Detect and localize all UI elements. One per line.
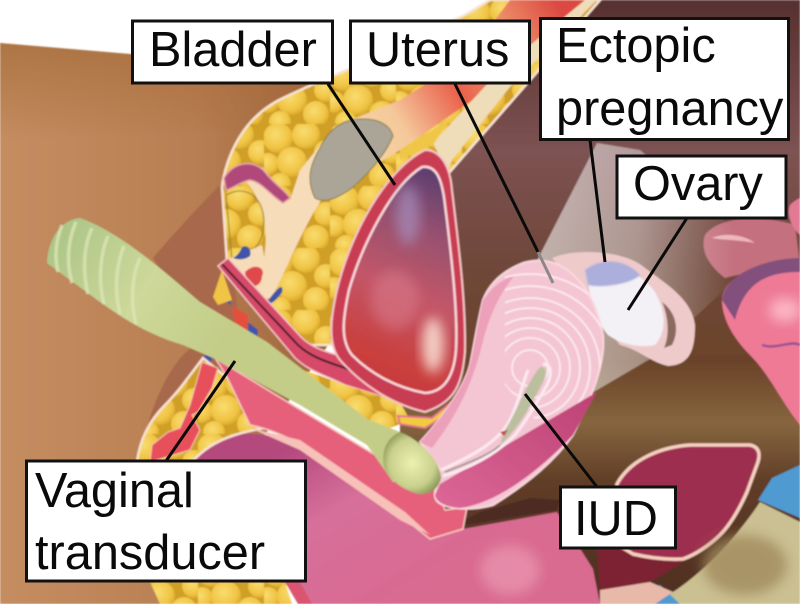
pubic bone: gray	[310, 119, 393, 200]
lumen highlight	[422, 317, 444, 373]
leader line: ectopic pregnancy	[590, 140, 605, 262]
abdominal wall: peach fascia	[433, 0, 597, 172]
red vessels	[245, 267, 263, 286]
label: Vaginal transducer: transducer	[35, 526, 265, 580]
leader line: IUD	[525, 394, 597, 487]
blue vessels	[202, 246, 283, 363]
uterus	[420, 261, 624, 509]
label: IUD	[560, 487, 676, 548]
lower uterine muscle	[435, 392, 597, 508]
bladder lumen	[344, 167, 456, 393]
label: Ectopic pregnancy	[540, 18, 788, 140]
blue spinal disc	[758, 465, 800, 518]
urethra	[218, 258, 400, 402]
bone and sacrum	[655, 502, 800, 604]
ovary with tube	[552, 252, 695, 366]
abdominal wall: muscle band	[317, 0, 597, 200]
myometrial rings	[504, 272, 601, 419]
subcutaneous fat	[222, 0, 600, 345]
vaginal wall	[215, 358, 467, 539]
leader line: uterus	[455, 84, 553, 283]
label: Uterus	[350, 21, 530, 83]
peach tissue by urethra	[226, 245, 272, 300]
label: Ovary: Ovary	[633, 157, 764, 211]
bowel	[170, 434, 600, 604]
ultrasound cone	[430, 143, 735, 482]
skin: outer thigh and abdomen	[0, 43, 360, 604]
lower fat lobule	[226, 191, 264, 260]
label: Ectopic pregnancy: Ectopic	[556, 19, 716, 73]
yellow strip above the bladder	[400, 118, 450, 160]
label: Bladder: Bladder	[149, 23, 317, 77]
lower right rectum sac	[597, 445, 759, 590]
dark slit under the uterus	[465, 498, 560, 525]
fat near vaginal opening	[213, 270, 232, 305]
endometrium outline	[443, 364, 550, 476]
label: Vaginal transducer	[26, 461, 306, 581]
label: Vaginal transducer: Vaginal	[35, 464, 194, 518]
label: Ectopic pregnancy: pregnancy	[556, 82, 784, 136]
transducer body	[47, 218, 400, 482]
left uterine wall	[420, 275, 515, 448]
vaginal transducer	[47, 218, 441, 494]
uterine cavity and IUD	[500, 367, 546, 445]
label: Ovary	[617, 156, 786, 218]
pubic fascia	[245, 127, 335, 298]
leader line: ovary	[628, 218, 687, 310]
leader line: vaginal transducer	[166, 361, 235, 461]
lower fat pad	[137, 358, 285, 462]
fat under bladder	[290, 365, 410, 430]
skin fold shading	[138, 183, 240, 470]
pelvic cavity background	[400, 0, 800, 604]
yellow stripe below bladder	[398, 400, 454, 428]
bladder wall	[331, 150, 465, 412]
clitoral erectile tissue	[224, 164, 290, 203]
right intestines	[704, 198, 800, 425]
bladder	[331, 150, 465, 428]
label: IUD: IUD	[574, 492, 658, 546]
transducer tip	[383, 432, 441, 494]
uterine body	[420, 261, 603, 509]
perineal vessels	[150, 362, 218, 462]
bowel highlight	[480, 545, 540, 595]
leader line: bladder	[328, 84, 395, 185]
label: Uterus: Uterus	[366, 23, 509, 77]
